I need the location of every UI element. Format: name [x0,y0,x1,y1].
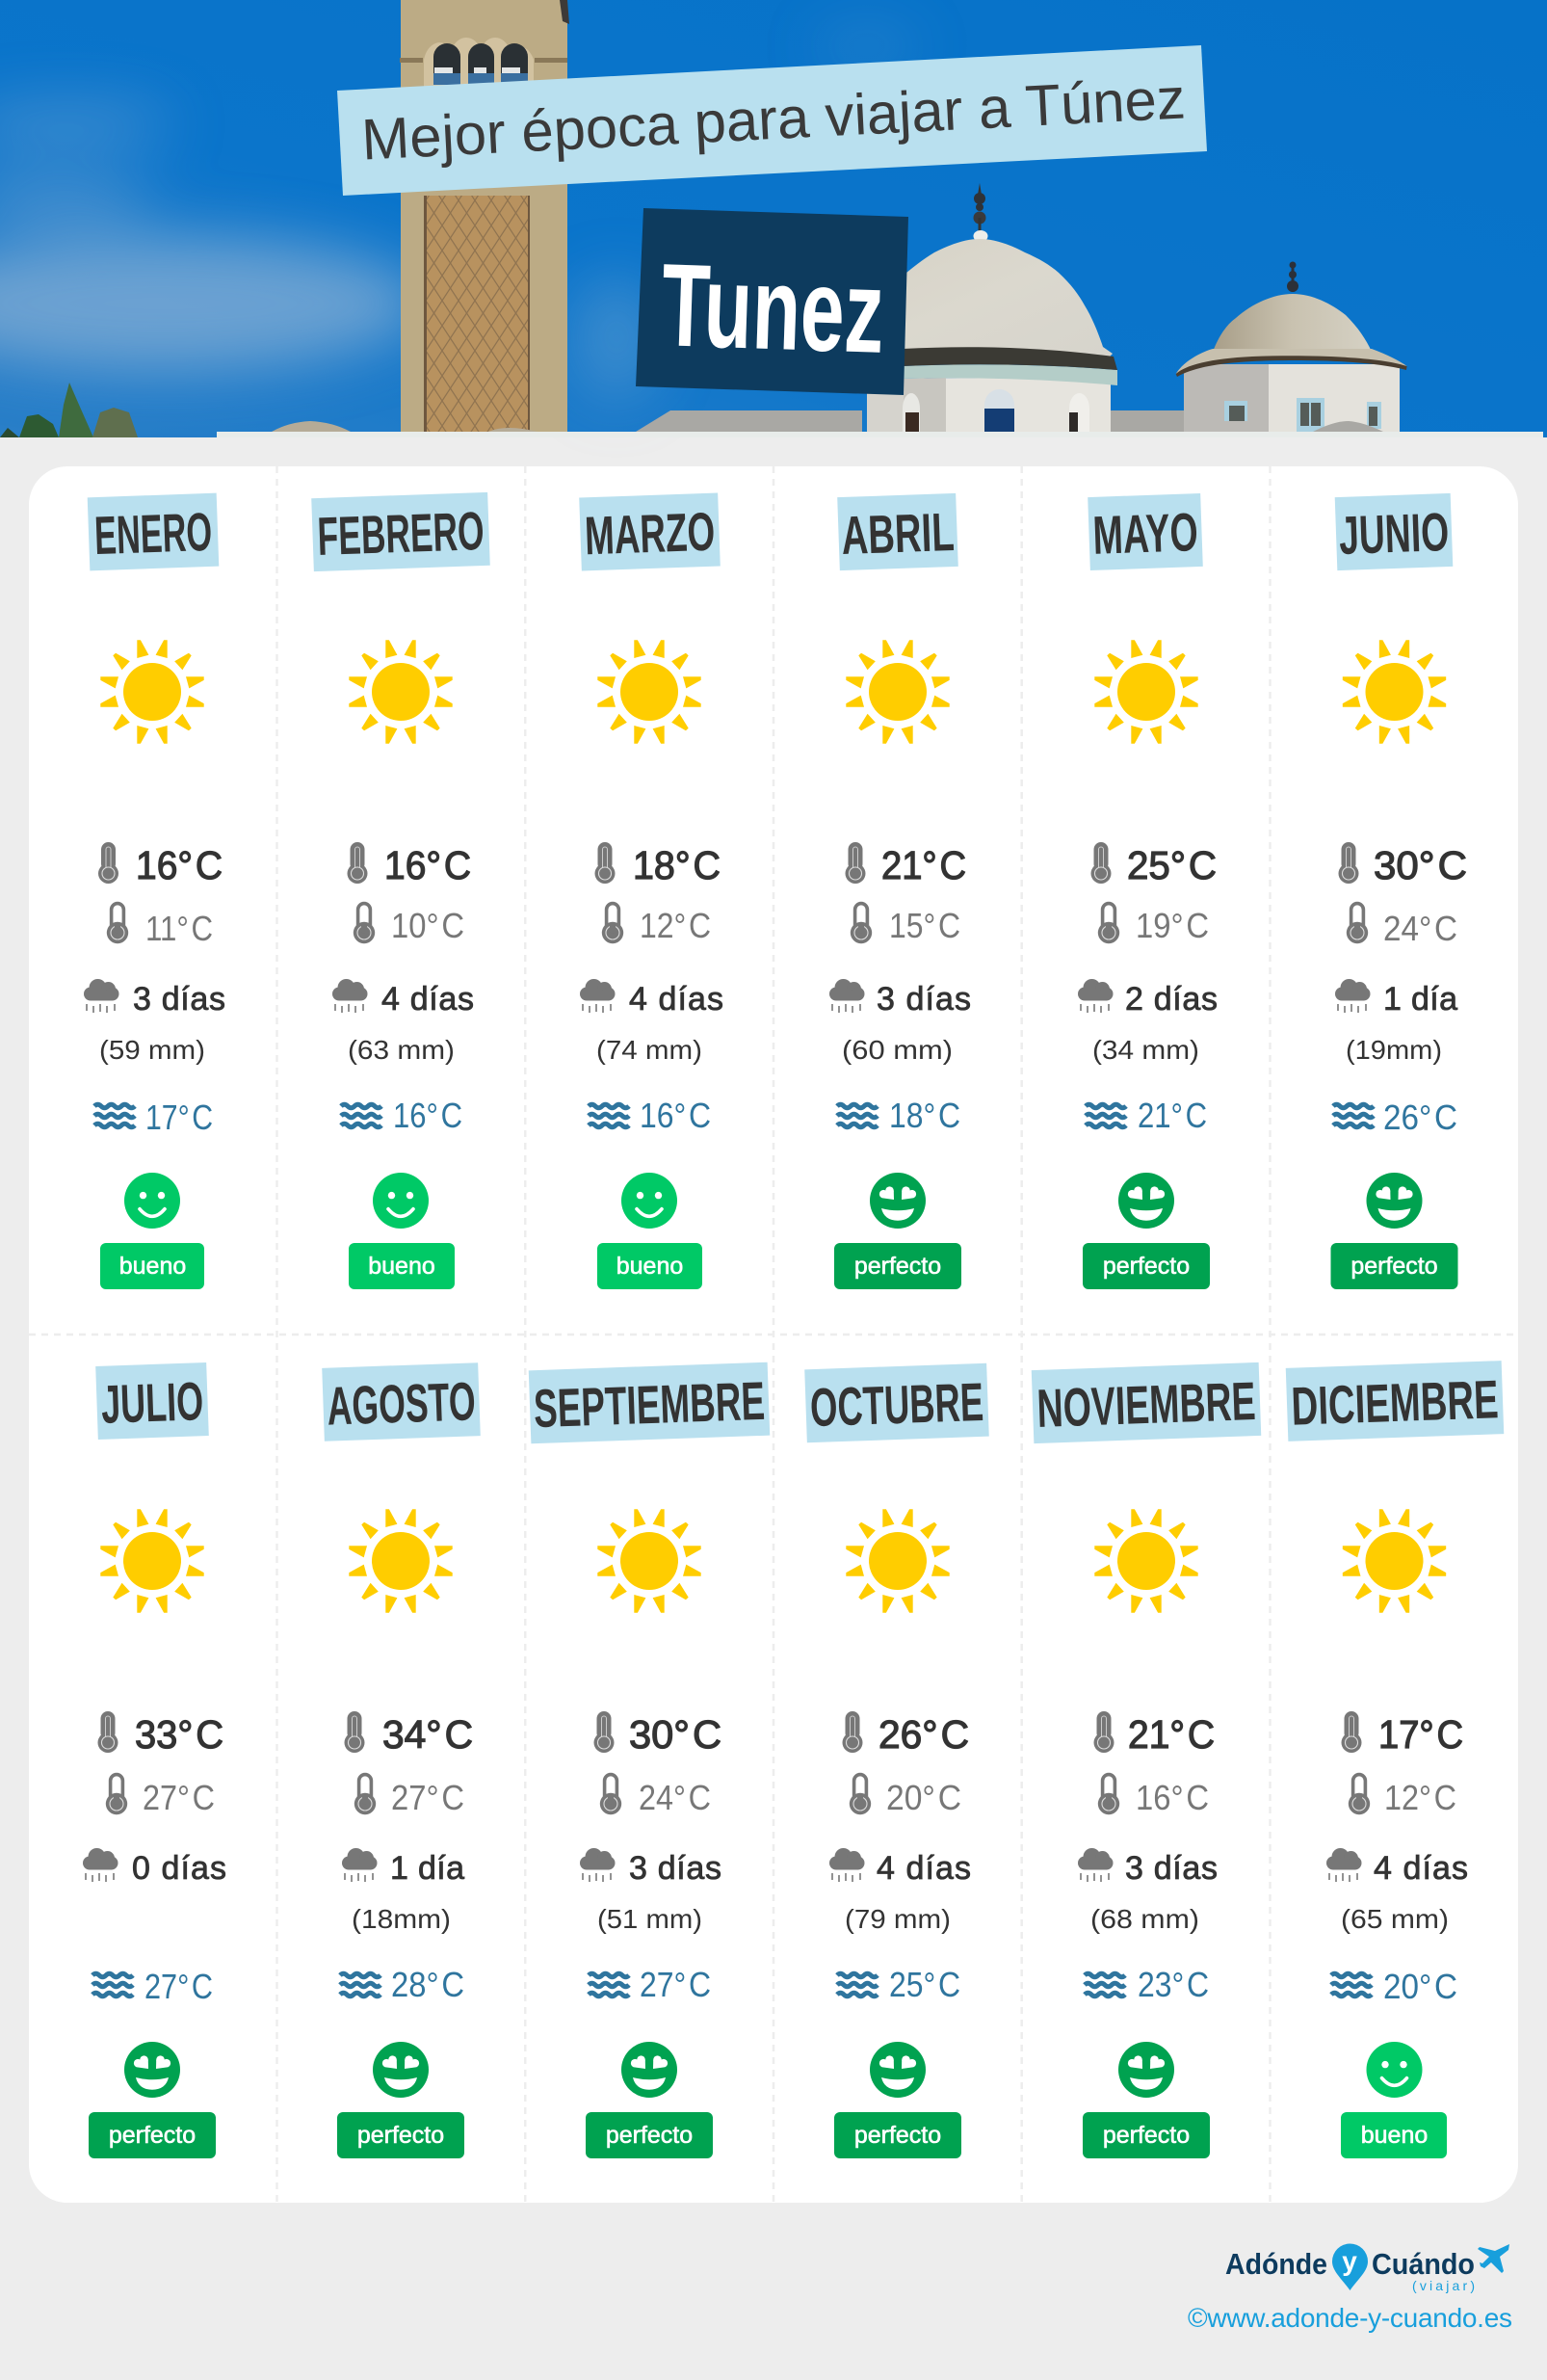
rating badge [597,1243,702,1289]
icon: low thermometer [107,904,128,943]
min temperature: 24°C [1383,909,1457,948]
icon: high thermometer [842,1711,863,1753]
label: JUNIO [1338,501,1450,566]
icon: love [124,2042,180,2098]
rainy days: 0 días [132,1850,226,1887]
rainy days: 3 días [1125,1850,1218,1887]
icon: low thermometer [600,1775,621,1814]
rating badge: perfecto [1103,2122,1190,2149]
icon: high thermometer [1090,842,1112,884]
sea temperature: 27°C [144,1967,213,2006]
icon: high thermometer [98,842,118,884]
sea temperature: 16°C [640,1096,711,1135]
title block [636,208,908,395]
logo: Adónde y Cuándo: Cuándo [1372,2247,1475,2281]
rainfall: (68 mm) [1090,1904,1199,1934]
icon: rain cloud [1078,979,1114,1013]
icon: rain cloud [332,979,368,1013]
large dome building [636,183,1269,437]
icon: waves [1085,1973,1125,1997]
icon: love [373,2042,429,2098]
rating badge: perfecto [854,1253,941,1280]
row: second half of the year [83,1361,1504,2158]
rainy days: 4 días [877,1850,971,1887]
sea temperature: 21°C [1138,1096,1207,1135]
rainfall: (34 mm) [1092,1035,1199,1065]
sea temperature: 16°C [393,1096,462,1135]
label [88,493,219,570]
min temperature: 20°C [886,1778,961,1817]
max temperature: 21°C [1128,1712,1215,1757]
max temperature: 17°C [1378,1712,1463,1757]
min temperature: 10°C [391,906,464,945]
min temperature: 27°C [143,1778,215,1817]
label: NOVIEMBRE [1036,1370,1257,1439]
icon: love [1366,1173,1422,1229]
rainfall: (79 mm) [845,1904,951,1934]
max temperature: 34°C [382,1712,473,1757]
rating badge [1331,1243,1458,1289]
icon: low thermometer [354,1775,376,1814]
icon: love [870,1173,926,1229]
month: junio [1331,493,1467,1289]
label: ABRIL [840,501,956,566]
rating badge [89,2112,216,2158]
min temperature: 27°C [391,1778,464,1817]
icon: rain cloud [1335,979,1370,1013]
min temperature: 24°C [639,1778,711,1817]
icon: love [621,2042,677,2098]
min temperature: 12°C [1384,1778,1456,1817]
tower [272,0,569,437]
sea temperature: 26°C [1383,1097,1457,1137]
max temperature: 25°C [1127,843,1217,887]
label [1088,493,1203,570]
icon: low thermometer [850,1775,871,1814]
month: julio [83,1362,226,2158]
sea temperature: 25°C [889,1965,960,2004]
rainy days: 1 día [390,1850,464,1887]
icon: map pin: y [1342,2246,1357,2276]
icon: rain cloud [829,979,865,1013]
icon: waves [837,1973,878,1997]
icon: rain cloud [84,979,119,1013]
max temperature: 33°C [135,1712,223,1757]
row: first half of the year [84,492,1467,1289]
subtitle banner [337,45,1207,196]
rainy days: 4 días [381,981,474,1018]
max temperature: 30°C [1374,843,1467,887]
icon: low thermometer [1098,1775,1119,1814]
icon: sun [100,1509,204,1613]
rating badge: bueno [616,1253,683,1280]
icon: waves [1086,1104,1126,1127]
icon: low thermometer [602,904,623,943]
icon: smile [621,1173,677,1229]
rainy days: 3 días [133,981,225,1018]
rainfall: (65 mm) [1341,1904,1449,1934]
month: noviembre [1032,1362,1261,2158]
label: JULIO [100,1370,204,1435]
rating badge [834,2112,961,2158]
month: agosto [322,1362,481,2158]
label [95,1362,209,1440]
month: mayo [1078,493,1218,1289]
icon: low thermometer [1347,904,1368,943]
icon: sun [349,640,453,744]
icon: high thermometer [1341,1711,1362,1753]
month: abril [829,493,971,1289]
rainy days: 2 días [1125,981,1218,1018]
label: MAYO [1091,501,1199,566]
website: ©www.adonde-y-cuando.es [1188,2303,1512,2333]
icon: plane [1478,2244,1509,2273]
label [311,492,490,571]
label [837,493,958,570]
icon: waves [837,1104,878,1127]
icon: love [1118,2042,1174,2098]
icon: waves [1331,1973,1372,1997]
label: ENERO [93,501,213,566]
subtitle banner: Mejor época para viajar a Túnez [360,66,1187,172]
icon: high thermometer [846,842,865,884]
icon: low thermometer [1098,904,1119,943]
icon: sun [1343,640,1446,744]
icon: waves [92,1973,133,1997]
icon: high thermometer [593,1711,615,1753]
rainfall: (60 mm) [842,1035,953,1065]
icon: rain cloud [83,1848,118,1882]
icon: sun [1094,640,1198,744]
min temperature: 11°C [145,909,213,948]
icon: smile [1366,2042,1422,2098]
label [529,1362,770,1443]
label: FEBRERO [317,500,485,567]
icon: high thermometer [1094,1711,1114,1753]
palm [0,383,138,437]
rating badge: perfecto [109,2122,196,2149]
label: SEPTIEMBRE [533,1370,766,1439]
icon: sun [1343,1509,1446,1613]
logo: Adónde y Cuándo: Adónde [1225,2247,1327,2281]
icon: map pin [1332,2243,1368,2290]
rating badge: perfecto [357,2122,444,2149]
month: octubre [804,1363,989,2158]
min temperature: 12°C [640,906,711,945]
rainy days: 4 días [1374,1850,1468,1887]
icon: smile [373,1173,429,1229]
month: septiembre [529,1362,770,2158]
header photo: tower and domes against the sky [0,0,1547,437]
icon: high thermometer [1339,842,1358,884]
icon: waves [94,1104,135,1127]
icon: rain cloud [829,1848,865,1882]
rainfall: (18mm) [352,1904,451,1934]
max temperature: 16°C [384,843,471,887]
label [579,493,721,570]
sea temperature: 23°C [1138,1965,1209,2004]
rating badge [349,1243,455,1289]
rating badge: perfecto [854,2122,941,2149]
icon: rain cloud [580,979,615,1013]
rating badge [1341,2112,1447,2158]
icon: low thermometer [851,904,872,943]
icon: rain cloud [1326,1848,1362,1882]
min temperature: 19°C [1136,906,1209,945]
icon: waves [589,1104,629,1127]
icon: sun [846,1509,950,1613]
icon: high thermometer [347,842,368,884]
max temperature: 30°C [629,1712,721,1757]
rainy days: 4 días [629,981,723,1018]
logo: Adónde y Cuándo: (viajar) [1412,2278,1475,2293]
max temperature: 18°C [633,843,721,887]
rainfall: (63 mm) [348,1035,455,1065]
label [804,1363,989,1442]
rating badge [1083,2112,1210,2158]
title block: Tunez [660,239,886,378]
sea temperature: 17°C [145,1097,213,1137]
low white building strip [217,432,1543,437]
label [1032,1362,1261,1443]
max temperature: 21°C [881,843,966,887]
rainy days: 3 días [877,981,971,1018]
icon: love [1118,1173,1174,1229]
rainy days: 3 días [629,1850,721,1887]
sea temperature: 18°C [889,1096,960,1135]
icon: sun [597,640,701,744]
rainfall: (51 mm) [597,1904,702,1934]
rainfall: (74 mm) [596,1035,702,1065]
label [1335,493,1453,570]
sea temperature: 28°C [391,1965,464,2004]
rainfall: (59 mm) [99,1035,205,1065]
label [322,1362,481,1441]
icon: high thermometer [98,1711,118,1753]
icon: low thermometer [354,904,375,943]
icon: sun [597,1509,701,1613]
icon: low thermometer [1349,1775,1370,1814]
icon: rain cloud [580,1848,615,1882]
rating badge: bueno [119,1253,186,1280]
rating badge [337,2112,464,2158]
max temperature: 26°C [878,1712,969,1757]
icon: high thermometer [595,842,615,884]
icon: love [870,2042,926,2098]
month: marzo [579,493,723,1289]
icon: waves [341,1104,381,1127]
max temperature: 16°C [136,843,223,887]
rating badge [1083,1243,1210,1289]
small dome building [1176,262,1407,437]
rating badge [100,1243,204,1289]
calendar panel [29,466,1518,2203]
rating badge [834,1243,961,1289]
label: OCTUBRE [809,1371,984,1438]
icon: waves [589,1973,629,1997]
month: febrero [311,492,490,1289]
rating badge: perfecto [606,2122,693,2149]
rating badge: perfecto [1350,1253,1438,1280]
icon: rain cloud [1078,1848,1114,1882]
rating badge: perfecto [1103,1253,1190,1280]
rating badge: bueno [368,1253,435,1280]
month: diciembre [1286,1361,1504,2158]
month: enero [84,493,225,1289]
icon: low thermometer [106,1775,127,1814]
rating badge [586,2112,713,2158]
icon: high thermometer [345,1711,364,1753]
rainfall: (19mm) [1346,1035,1442,1065]
label: AGOSTO [326,1370,477,1437]
logo: Adónde y Cuándo [1225,2243,1509,2293]
icon: sun [846,640,950,744]
sea temperature: 20°C [1383,1967,1457,2006]
min temperature: 15°C [889,906,960,945]
icon: waves [340,1973,380,1997]
rating badge: bueno [1361,2122,1428,2149]
rainy days: 1 día [1383,981,1457,1018]
icon: sun [100,640,204,744]
icon: smile [124,1173,180,1229]
icon: sun [349,1509,453,1613]
min temperature: 16°C [1136,1778,1209,1817]
sea temperature: 27°C [640,1965,711,2004]
icon: sun [1094,1509,1198,1613]
icon: waves [1333,1104,1374,1127]
icon: rain cloud [342,1848,378,1882]
label: MARZO [584,501,716,566]
